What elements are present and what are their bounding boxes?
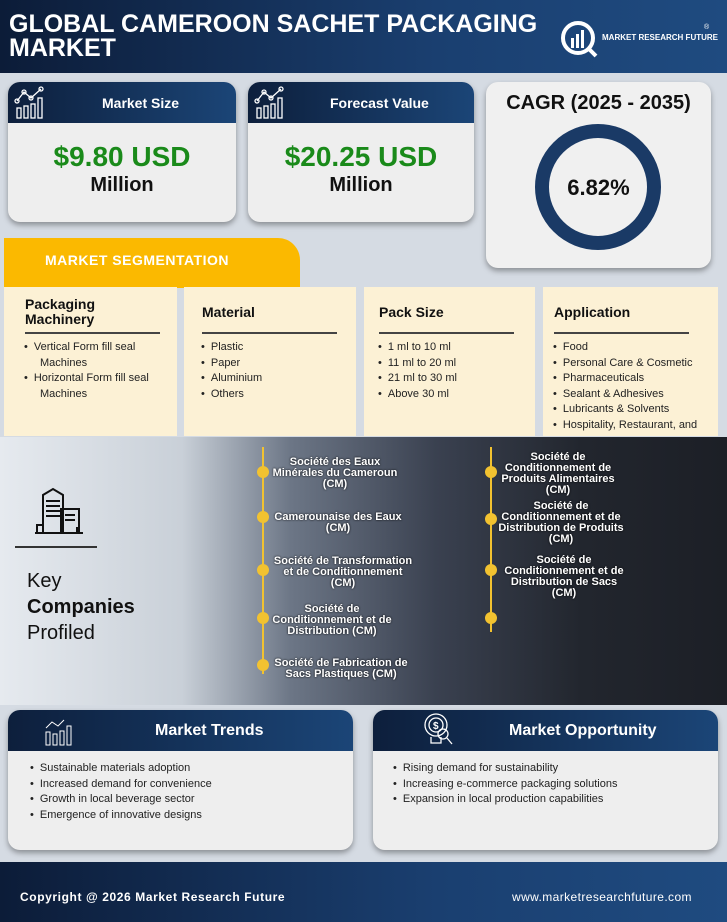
key companies section xyxy=(0,437,727,705)
key companies section: Camerounaise des Eaux (CM) xyxy=(274,511,402,534)
card: market opportunity: Rising demand for sustainability xyxy=(403,762,558,774)
segment: material: Paper xyxy=(211,357,240,369)
key companies section: Société de Conditionnement de Produits Alimentaires (CM) xyxy=(501,451,615,496)
segment: application: Sealant & Adhesives xyxy=(563,388,664,400)
card: market trends: Sustainable materials adoption xyxy=(40,762,190,774)
card: market size: Million xyxy=(90,174,154,196)
segment: packaging machinery: Machines xyxy=(40,388,87,400)
key companies section: Société des Eaux Minérales du Cameroun (CM) xyxy=(273,456,397,490)
heading: key companies profiled: Profiled xyxy=(27,622,95,644)
key companies section: Société de Conditionnement et de Distribution (CM) xyxy=(272,603,392,637)
segment: material: Plastic xyxy=(211,341,243,353)
segment: pack size: 11 ml to 20 ml xyxy=(388,357,456,369)
timeline left xyxy=(262,447,264,674)
heading: key companies profiled: Companies xyxy=(27,596,135,618)
segment: pack size: 1 ml to 10 ml xyxy=(388,341,451,353)
heading: key companies profiled: Key xyxy=(27,570,61,592)
segment: packaging machinery: Horizontal Form fill seal xyxy=(34,372,149,384)
card: market size: $9.80 USD xyxy=(54,141,190,172)
card: market opportunity: $ xyxy=(433,721,439,732)
key companies section: Société de Transformation et de Conditionnement (CM) xyxy=(274,555,412,589)
card: market opportunity: Market Opportunity xyxy=(509,722,657,739)
icon: building xyxy=(35,488,83,534)
card: CAGR: 6.82% xyxy=(567,175,630,200)
segment: material: Material xyxy=(202,304,255,320)
card: market size: Market Size xyxy=(102,95,179,111)
segment: material xyxy=(184,287,356,436)
footer: www.marketresearchfuture.com xyxy=(512,890,692,904)
segment: application: Application xyxy=(554,304,630,320)
card: market trends: Market Trends xyxy=(155,722,263,739)
card: market opportunity: Expansion in local production capabilities xyxy=(403,793,603,805)
donut ring xyxy=(535,124,661,250)
card: market trends: Emergence of innovative designs xyxy=(40,809,202,821)
heading: key companies profiled xyxy=(27,570,135,644)
segment: pack size: 21 ml to 30 ml xyxy=(388,372,457,384)
segment: pack size: Pack Size xyxy=(379,304,444,320)
title: GLOBAL CAMEROON SACHET PACKAGING xyxy=(9,10,537,38)
card: market trends: Increased demand for convenience xyxy=(40,778,212,790)
footer: Copyright @ 2026 Market Research Future xyxy=(20,890,285,904)
logo: ® xyxy=(704,24,709,31)
segment: application: Food xyxy=(563,341,588,353)
card: forecast value: $20.25 USD xyxy=(285,141,437,172)
header bar xyxy=(0,0,727,73)
card: market trends: Growth in local beverage sector xyxy=(40,793,195,805)
key companies section: Société de Conditionnement et de Distribution de Produits (CM) xyxy=(498,500,624,545)
segment: packaging machinery xyxy=(4,287,177,436)
card: market opportunity xyxy=(373,710,718,850)
market segmentation tab: MARKET SEGMENTATION xyxy=(45,252,229,268)
key companies section: Société de Fabrication de Sacs Plastiques (CM) xyxy=(274,657,408,680)
market segmentation tab xyxy=(4,238,300,288)
segment: packaging machinery: Packaging xyxy=(25,296,95,312)
segment: application: Pharmaceuticals xyxy=(563,372,644,384)
segment: material: Others xyxy=(211,388,244,400)
card: forecast value xyxy=(248,82,474,222)
segment: application: Lubricants & Solvents xyxy=(563,403,669,415)
segment: packaging machinery: Vertical Form fill seal xyxy=(34,341,135,353)
segment: application: Personal Care & Cosmetic xyxy=(563,357,692,369)
key companies section: Société de Conditionnement et de Distribution de Sacs (CM) xyxy=(504,554,624,599)
card: market trends xyxy=(8,710,353,850)
timeline right xyxy=(490,447,492,632)
segment: packaging machinery: Machines xyxy=(40,357,87,369)
card: market size xyxy=(8,82,236,222)
segment: application: Hospitality, Restaurant, and xyxy=(563,419,697,431)
title xyxy=(9,10,537,62)
card: market opportunity: Increasing e-commerce packaging solutions xyxy=(403,778,617,790)
logo: MARKET RESEARCH FUTURE xyxy=(602,33,718,42)
segment: pack size xyxy=(364,287,535,436)
segment: packaging machinery: Machinery xyxy=(25,311,94,327)
segment: pack size: Above 30 ml xyxy=(388,388,449,400)
logo xyxy=(561,21,718,58)
footer xyxy=(0,862,727,922)
card: forecast value: Million xyxy=(329,174,393,196)
card: CAGR xyxy=(486,82,711,268)
card: CAGR: CAGR (2025 - 2035) xyxy=(506,92,691,114)
segment: application xyxy=(543,287,718,436)
card: forecast value: Forecast Value xyxy=(330,95,429,111)
title: MARKET xyxy=(9,34,116,62)
segment: material: Aluminium xyxy=(211,372,262,384)
